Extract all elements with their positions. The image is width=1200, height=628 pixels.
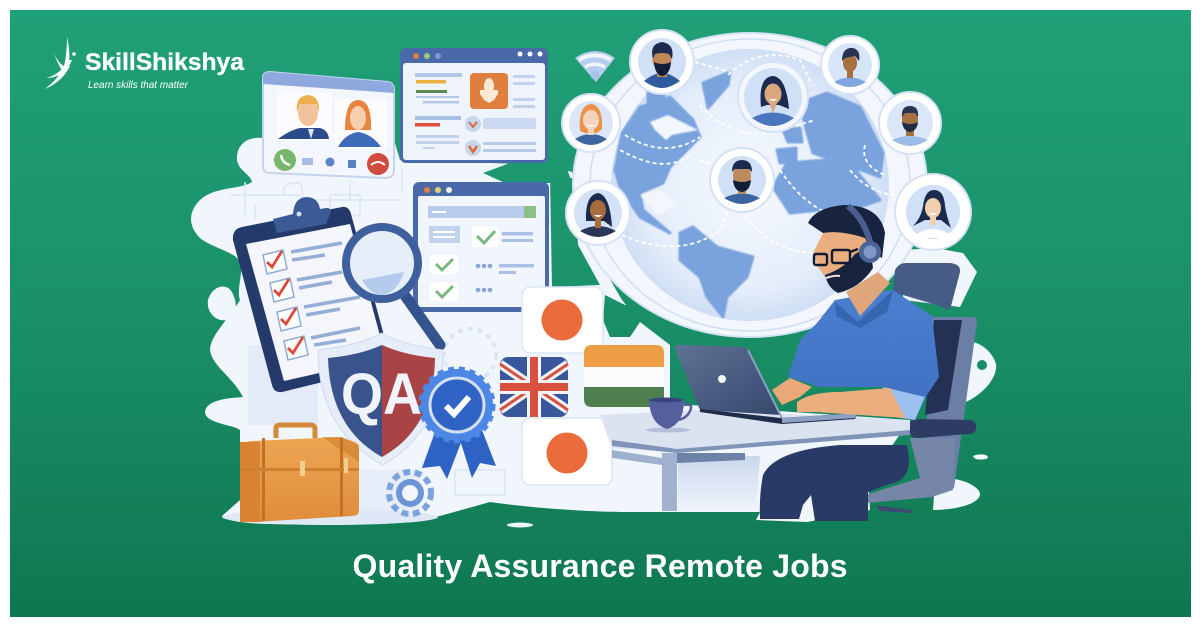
avatar: man right xyxy=(879,92,941,154)
suitcase xyxy=(222,425,438,525)
panel: test results window xyxy=(413,182,549,312)
green gaps between splash shapes xyxy=(483,163,987,370)
checklist rows xyxy=(263,243,360,360)
pale backdrop lines and blocks xyxy=(230,170,505,495)
avatar: woman far right xyxy=(895,174,971,250)
globe continents xyxy=(615,72,883,317)
title: Quality Assurance Remote Jobs xyxy=(352,548,848,584)
clipboard clip xyxy=(273,197,331,233)
avatar: video caller man xyxy=(278,95,329,139)
worker trousers xyxy=(760,445,909,521)
flag: UK xyxy=(500,357,568,417)
logo xyxy=(45,37,244,91)
globe outer ring xyxy=(573,33,927,337)
glasses xyxy=(814,249,858,265)
remote worker xyxy=(760,205,939,521)
worker collar xyxy=(835,290,893,328)
globe land highlights xyxy=(640,115,698,215)
avatar: red-haired woman xyxy=(562,94,620,152)
globe inner ring line xyxy=(590,39,910,331)
laptop xyxy=(675,345,858,424)
flag: Japan top xyxy=(522,287,603,353)
avatar: video caller woman xyxy=(338,100,381,147)
worker neck xyxy=(846,272,890,316)
avatar: man centre xyxy=(710,148,774,212)
magnifying glass xyxy=(346,227,440,345)
avatar: man top right xyxy=(821,36,879,94)
globe with connected people xyxy=(562,30,971,337)
globe sphere xyxy=(611,49,889,321)
flag: India xyxy=(584,345,664,407)
icon: orange badge xyxy=(470,73,508,109)
flag: Japan bottom xyxy=(522,418,612,485)
icon: accept call xyxy=(274,149,296,171)
worker right hand and forearm xyxy=(797,388,905,418)
headset xyxy=(848,206,881,263)
worker cuff xyxy=(883,387,925,420)
worker shirt xyxy=(788,290,939,420)
white splash blobs xyxy=(191,138,996,527)
avatar: bearded man top xyxy=(630,30,694,94)
panel: video call window xyxy=(263,72,394,178)
rosette badge xyxy=(420,368,496,479)
coffee cup xyxy=(646,398,691,432)
icon: end call xyxy=(367,153,389,175)
icon: wifi xyxy=(575,51,615,82)
logo wordmark: SkillShikshya xyxy=(85,49,244,76)
logo tagline: Learn skills that matter xyxy=(88,79,188,91)
office chair xyxy=(865,263,977,513)
shield label: QA xyxy=(341,362,422,427)
avatar: woman left xyxy=(566,181,630,245)
worker head xyxy=(808,205,885,293)
desk xyxy=(600,410,910,512)
panel: report window xyxy=(400,48,548,163)
icon: logo figure xyxy=(45,37,76,89)
globe connection lines xyxy=(620,55,900,253)
worker left hand and arm xyxy=(772,378,812,405)
clipboard checklist xyxy=(233,197,392,392)
shield with QA xyxy=(318,333,443,465)
gear icon xyxy=(389,472,431,514)
avatar: woman centre top xyxy=(738,62,808,132)
